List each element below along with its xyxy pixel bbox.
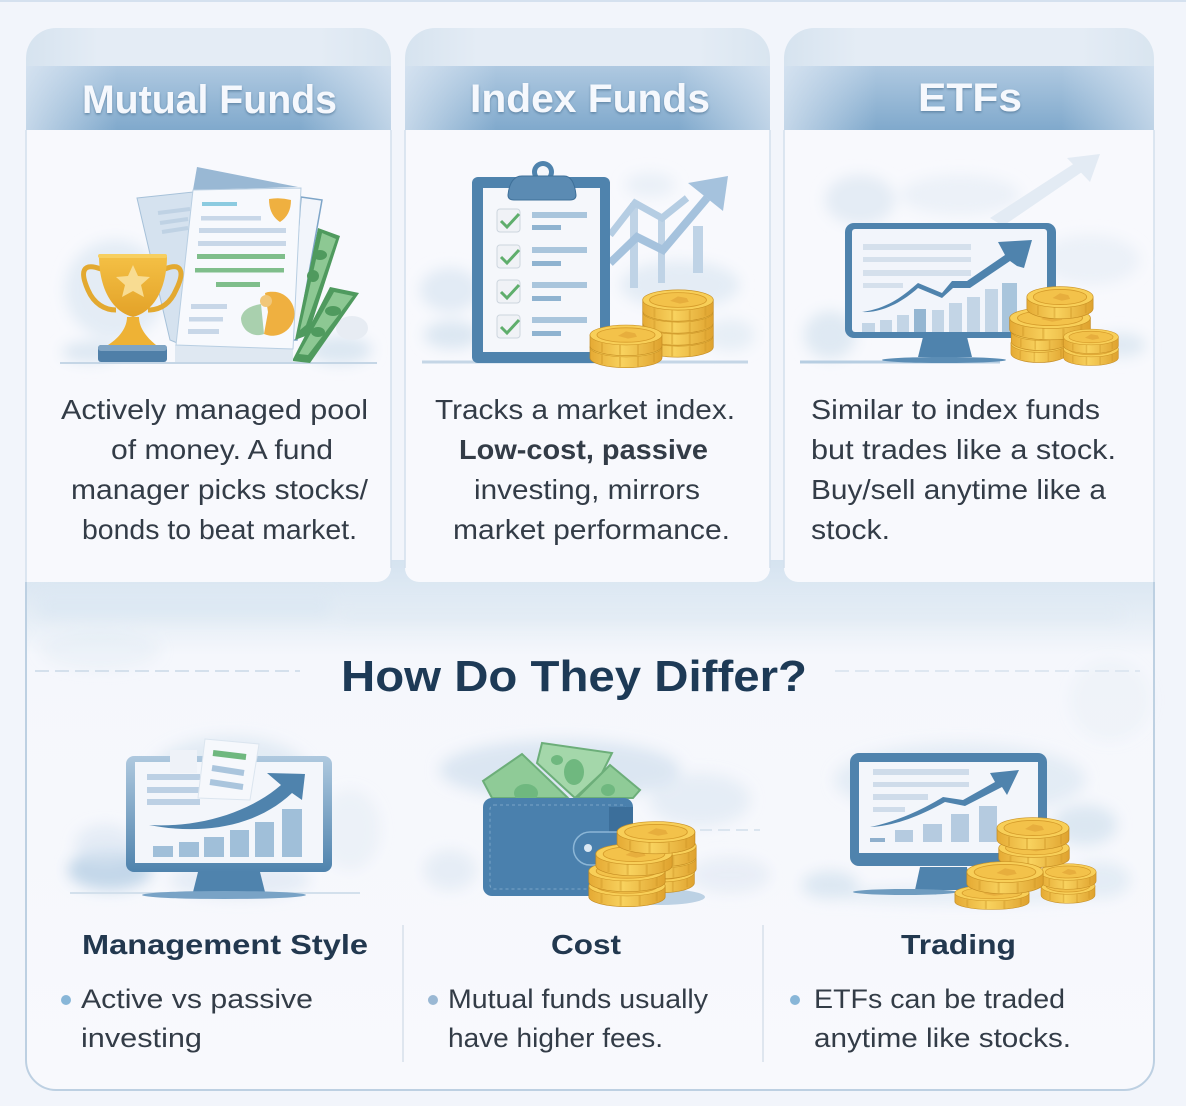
bullet: active vs passive (61, 984, 313, 1053)
column: Cost (428, 929, 709, 1053)
wallet (483, 798, 705, 905)
text: Index Funds description: market performance. (453, 514, 730, 545)
panel: comparison section background (26, 560, 1154, 1090)
subheading: Management Style: Management Style (82, 929, 368, 960)
chart: rising arrow (610, 176, 728, 288)
bullet: trade anytime (790, 984, 1071, 1053)
text: ETFs description: Buy/sell anytime like a (811, 474, 1106, 505)
bullet: active vs passive: Active vs passive (81, 984, 313, 1014)
text: ETFs description: but trades like a stock. (811, 434, 1116, 465)
text: Mutual Funds description: bonds to beat market. (82, 514, 357, 545)
text: ETFs description: stock. (811, 514, 890, 545)
icon: coin stacks (1010, 287, 1118, 366)
pie chart (241, 292, 294, 336)
monitor (845, 223, 1056, 363)
text: Mutual Funds description: Actively managed pool (61, 394, 368, 425)
banknotes (483, 743, 640, 802)
text: Mutual Funds description: of money. A fund (111, 434, 333, 465)
subheading: Trading: Trading (901, 929, 1016, 960)
badge (269, 198, 291, 222)
text: ETFs description (811, 394, 1116, 545)
illustration: management style monitor (68, 737, 380, 899)
subheading: Cost: Cost (551, 929, 621, 960)
panel: Mutual Funds (26, 28, 391, 582)
bullet: higher fees (428, 984, 709, 1053)
heading: How Do They Differ?: How Do They Differ? (341, 652, 807, 701)
icon: coin stacks (955, 818, 1096, 910)
column: Trading (790, 929, 1071, 1053)
papers (170, 739, 259, 800)
text: ETFs description: Similar to index funds (811, 394, 1100, 425)
clipboard (472, 161, 610, 363)
icon: trophy (84, 254, 181, 362)
icon: coin stacks (590, 290, 713, 368)
bullet: higher fees: have higher fees. (448, 1023, 663, 1053)
bullet: trade anytime: anytime like stocks. (814, 1023, 1071, 1053)
text: Index Funds description (435, 394, 735, 545)
illustration: trophy, fund documents and banknotes (60, 167, 377, 364)
illustration: trading monitor with coins (802, 744, 1130, 910)
heading: ETFs: ETFs (918, 76, 1022, 120)
text: Mutual Funds description (61, 394, 368, 545)
bullet: higher fees: Mutual funds usually (448, 984, 709, 1014)
heading: Mutual Funds: Mutual Funds (82, 78, 337, 122)
panel: Index Funds (405, 28, 770, 582)
column: Management Style (61, 929, 368, 1053)
text: Index Funds description: Low-cost, passive (459, 434, 708, 465)
bullet: active vs passive: investing (81, 1023, 202, 1053)
bullet: trade anytime: ETFs can be traded (814, 984, 1065, 1014)
document lines (188, 202, 286, 334)
text: Index Funds description: investing, mirrors (474, 474, 700, 505)
text: Mutual Funds description: manager picks stocks/ (71, 474, 368, 505)
heading: Index Funds: Index Funds (470, 77, 710, 121)
text: Index Funds description: Tracks a market index. (435, 394, 735, 425)
illustration: wallet with cash and coins (424, 740, 770, 907)
panel: ETFs (784, 28, 1154, 582)
illustration: trading monitor with coins (800, 154, 1146, 366)
growth arrow (149, 773, 305, 829)
chart bars (153, 809, 302, 857)
illustration: checklist clipboard, chart and coins (420, 161, 755, 368)
icon: coin stacks (589, 822, 696, 907)
faded background arrow (990, 154, 1100, 226)
